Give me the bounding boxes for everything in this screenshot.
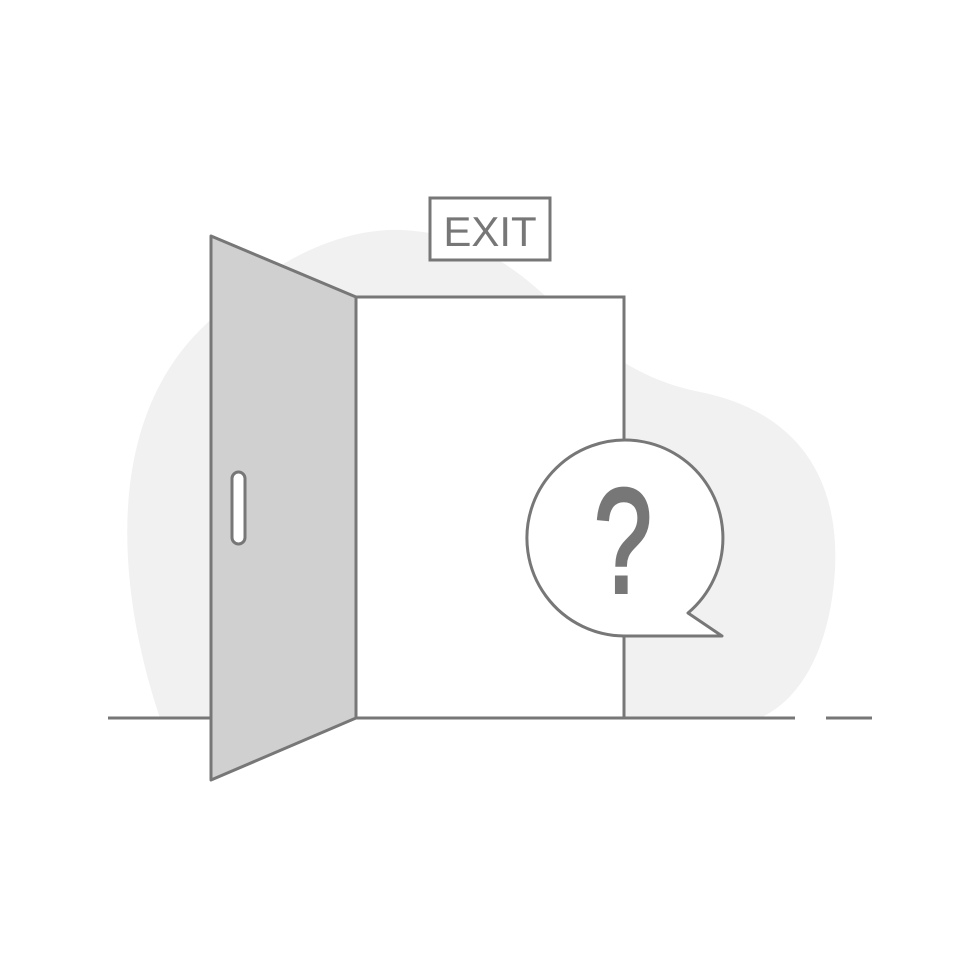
exit sign: EXIT bbox=[443, 208, 537, 255]
background blob bbox=[127, 230, 835, 718]
door handle bbox=[232, 472, 245, 544]
exit sign bbox=[430, 198, 550, 260]
floor line bbox=[108, 716, 872, 720]
speech bubble with question mark: ? bbox=[594, 459, 652, 624]
speech bubble with question mark bbox=[527, 440, 723, 636]
open door panel bbox=[211, 236, 356, 780]
door frame bbox=[356, 297, 624, 718]
